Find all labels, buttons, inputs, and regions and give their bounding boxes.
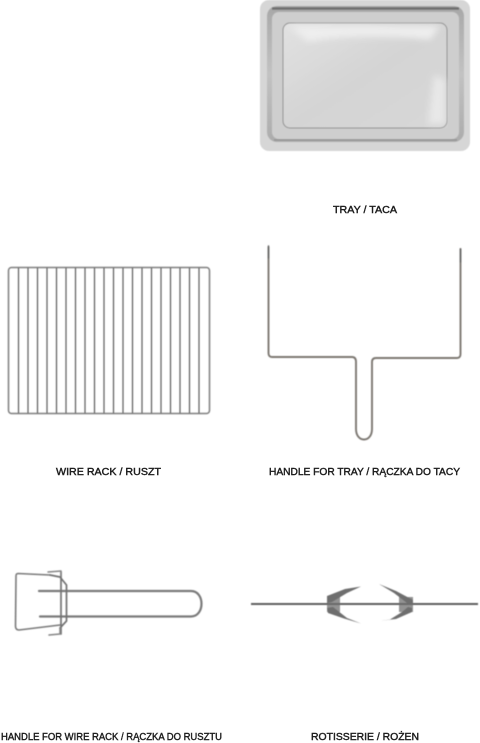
wire rack label: WIRE RACK / RUSZT — [56, 467, 162, 478]
rotisserie — [251, 584, 478, 624]
tray outer rim — [260, 0, 470, 151]
rack wires — [18, 268, 199, 413]
tray label: TRAY / TACA — [333, 205, 397, 216]
left fork — [327, 586, 361, 624]
right fork — [378, 584, 413, 621]
rack frame — [8, 268, 210, 414]
rotisserie label: ROTISSERIE / ROŻEN — [311, 730, 419, 743]
handle for wire rack — [16, 571, 202, 635]
tray raised base — [272, 12, 459, 139]
tray centre panel — [283, 23, 447, 128]
rotisserie spit — [251, 603, 478, 605]
handle clamp — [16, 574, 60, 630]
handle for tray label: HANDLE FOR TRAY / RĄCZKA DO TACY — [269, 467, 460, 478]
handle for wire rack label: HANDLE FOR WIRE RACK / RĄCZKA DO RUSZTU — [1, 732, 222, 743]
tray — [260, 0, 470, 151]
wire rack — [8, 268, 210, 414]
tray well — [267, 6, 464, 142]
handle grip loop — [39, 591, 202, 616]
handle for tray — [268, 246, 460, 440]
